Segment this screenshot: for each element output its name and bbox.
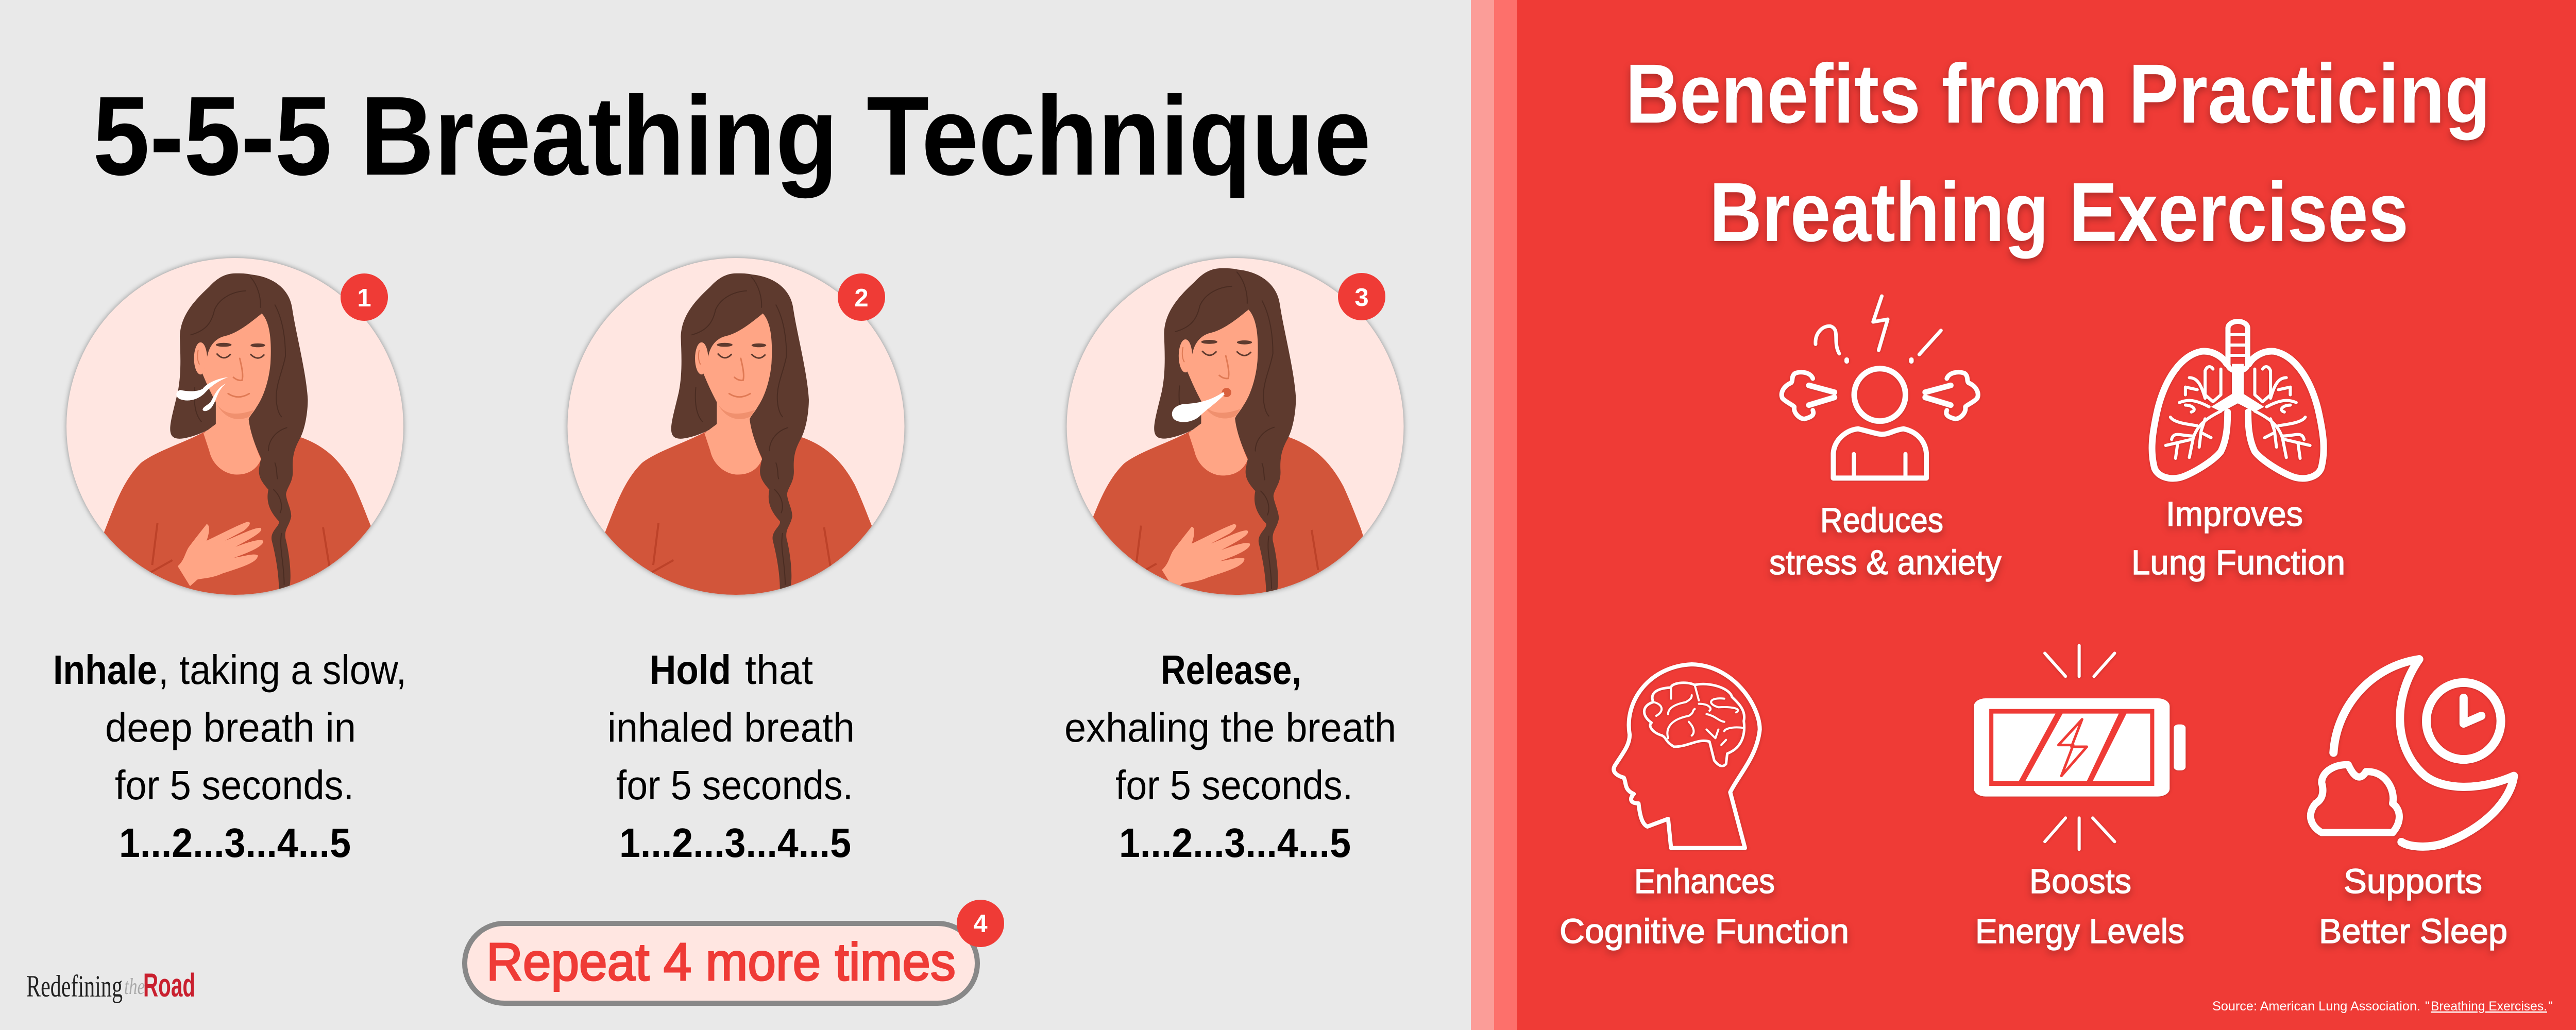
text block: step 2: Hold [650, 647, 731, 693]
illustration: step 1 inhale [66, 258, 403, 616]
background panel: benefits [1517, 0, 2576, 1030]
label: enhances cognitive function: Cognitive Function [1560, 912, 1849, 951]
text block: step 2: 1...2...3...4...5 [619, 820, 851, 866]
icon: moon clock cloud [2311, 659, 2514, 847]
label: improves lung function: Improves [2166, 495, 2303, 534]
heading: benefits: Breathing Exercises [1709, 165, 2409, 259]
source note: " [2425, 999, 2430, 1014]
text block: step 2 [607, 647, 855, 866]
label: supports better sleep: Supports [2344, 862, 2482, 901]
text block: step 2: for 5 seconds. [616, 762, 853, 808]
label: boosts energy levels: Energy Levels [1975, 912, 2184, 951]
badge: number 3: 3 [1354, 284, 1369, 312]
icon: lungs [2152, 321, 2324, 478]
badge: number 1: 1 [357, 284, 371, 312]
label: reduces stress [1769, 501, 2002, 582]
text block: step 3: Release, [1161, 647, 1301, 693]
illustration: step 2 hold [568, 258, 905, 616]
icon: battery with bolt [1974, 645, 2185, 849]
source note: " [2548, 999, 2553, 1014]
label: supports better sleep [2319, 862, 2507, 951]
source note [2212, 999, 2553, 1014]
logo: Road [143, 967, 195, 1004]
callout: repeat [465, 900, 1004, 1003]
logo: the [124, 974, 145, 999]
title: 5-5-5 Breathing Technique [93, 74, 1371, 199]
badge: number 3 [1338, 273, 1385, 320]
background panel: technique [0, 0, 1471, 1030]
text block: step 1: for 5 seconds. [115, 762, 354, 808]
icon: stressed person [1782, 296, 1978, 478]
illustration: step 3 release [1059, 258, 1403, 621]
label: enhances cognitive function: Enhances [1634, 862, 1775, 901]
badge: number 2: 2 [854, 284, 869, 312]
logo: Redefining [26, 969, 123, 1003]
text block: step 3 [1064, 647, 1396, 866]
badge: number 1 [341, 273, 388, 321]
label: supports better sleep: Better Sleep [2319, 912, 2507, 951]
text block: step 1: Inhale [53, 647, 157, 693]
source note: Breathing Exercises. [2431, 999, 2547, 1014]
label: reduces stress: Reduces [1820, 501, 1943, 540]
text block: step 3: for 5 seconds. [1115, 762, 1353, 808]
text block: step 1: deep breath in [105, 705, 356, 750]
heading: benefits: Benefits from Practicing [1625, 46, 2490, 141]
stripe: light pink [1471, 0, 1494, 1030]
callout: repeat: 4 [973, 910, 988, 938]
callout: repeat: Repeat 4 more times [486, 932, 956, 991]
icon: head with brain [1614, 664, 1760, 848]
text block: step 3: 1...2...3...4...5 [1119, 820, 1351, 866]
text block: step 3: exhaling the breath [1064, 705, 1396, 750]
text block: step 1: 1...2...3...4...5 [119, 820, 351, 866]
label: improves lung function: Lung Function [2131, 543, 2345, 582]
text block: step 2: that [745, 647, 813, 693]
stripe: medium pink [1494, 0, 1517, 1030]
source note: Source: American Lung Association. [2212, 999, 2420, 1014]
badge: number 2 [838, 273, 885, 321]
heading: benefits [1625, 46, 2490, 259]
label: boosts energy levels [1975, 862, 2184, 951]
text block: step 2: inhaled breath [607, 705, 855, 750]
label: reduces stress: stress & anxiety [1769, 543, 2002, 582]
label: boosts energy levels: Boosts [2029, 862, 2131, 901]
label: improves lung function [2131, 495, 2345, 582]
text block: step 1: , taking a slow, [158, 647, 406, 693]
label: enhances cognitive function [1560, 862, 1849, 951]
text block: step 1 [53, 647, 406, 866]
